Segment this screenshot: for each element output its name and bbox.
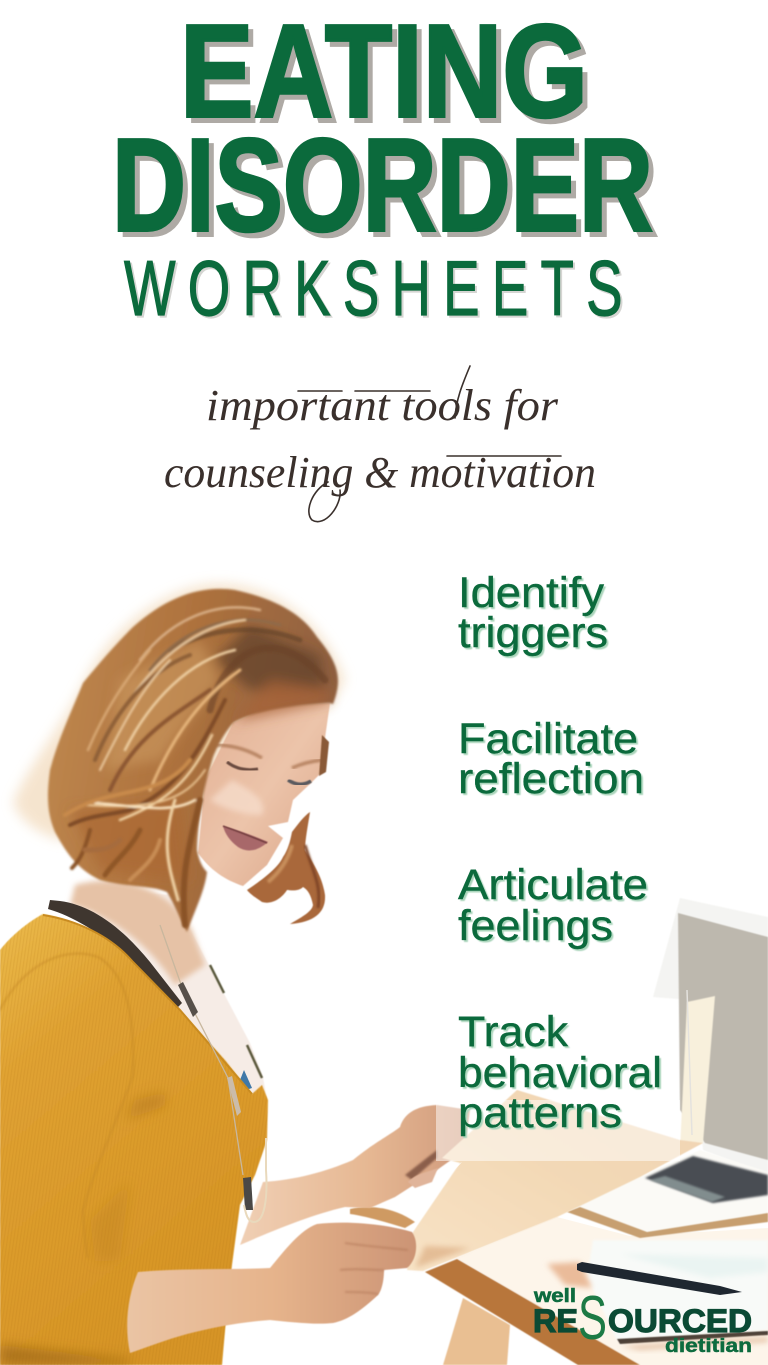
back hand finger shadow [405, 1150, 437, 1180]
table plank [425, 1259, 640, 1365]
hair strands [65, 607, 325, 925]
item: identify triggers: triggers [458, 609, 608, 657]
right hair curl [247, 812, 325, 924]
back forearm and hand [240, 1105, 470, 1245]
photo: woman reading folder at laptop [0, 584, 768, 1365]
sleeve seam [0, 954, 133, 1258]
back hand fingertips [408, 1168, 438, 1188]
item: track behavioral patterns: patterns [460, 1091, 624, 1139]
translucent text panel [436, 1100, 680, 1161]
pen [577, 1262, 742, 1295]
item: track behavioral patterns: Track [460, 1010, 571, 1058]
hair halo [13, 584, 345, 840]
front hand fingers [340, 1243, 408, 1294]
camisole edge [210, 965, 262, 1078]
front forearm and hand [127, 1223, 416, 1353]
logo: well resourced dietitian [533, 1284, 752, 1357]
item: track behavioral patterns: behavioral [460, 1051, 664, 1099]
item: track behavioral patterns: Track [458, 1008, 569, 1056]
notebook [587, 1240, 768, 1350]
hair [48, 589, 338, 932]
laptop left edge sheet line [687, 990, 692, 1135]
subtitle script [164, 366, 596, 522]
title: EATING: EATING [180, 0, 588, 144]
desk surface [457, 1217, 768, 1365]
item: identify triggers: triggers [460, 611, 610, 659]
item: track behavioral patterns: behavioral [458, 1049, 662, 1097]
folder [407, 1090, 703, 1271]
item: articulate feelings [458, 861, 650, 952]
item: facilitate reflection: Facilitate [460, 717, 640, 765]
item: articulate feelings: Articulate [458, 861, 648, 909]
item: identify triggers [458, 569, 610, 659]
title: WORKSHEETS: WORKSHEETS [124, 245, 635, 332]
necklace [160, 925, 266, 1222]
sweater shading [0, 1092, 165, 1365]
logo: well resourced dietitian: OURCED [608, 1303, 752, 1339]
right hair strip [319, 735, 329, 776]
sweater ribs [0, 914, 268, 1365]
face [198, 703, 330, 886]
subtitle script: counseling & motivation [164, 448, 596, 497]
item: facilitate reflection: reflection [460, 757, 646, 805]
neck shading [70, 881, 205, 985]
white page corner [413, 1162, 462, 1232]
neckline trim [43, 915, 252, 1094]
item: facilitate reflection: Facilitate [458, 715, 638, 763]
laptop [567, 898, 768, 1238]
item: articulate feelings: Articulate [460, 863, 650, 911]
logo: well resourced dietitian: dietitian [665, 1336, 752, 1357]
table leg [443, 1298, 510, 1365]
list: benefits [458, 569, 664, 1139]
item: facilitate reflection: reflection [458, 755, 644, 803]
neck and chest [78, 890, 267, 1100]
table back edge [350, 1207, 415, 1228]
title: WORKSHEETS: WORKSHEETS [126, 247, 637, 334]
folder shadow lower edge [415, 1246, 470, 1268]
folder back sheet [680, 996, 715, 1150]
logo: well resourced dietitian: well [533, 1286, 576, 1307]
dark strap [48, 900, 182, 1010]
item: track behavioral patterns [458, 1008, 664, 1139]
item: identify triggers: Identify [458, 569, 605, 617]
title: EATING: EATING [185, 2, 593, 150]
hair tonal blotches [70, 625, 330, 880]
item: articulate feelings: feelings [458, 902, 613, 950]
pen shadow [547, 1262, 592, 1288]
item: facilitate reflection [458, 715, 646, 805]
item: identify triggers: Identify [460, 571, 607, 619]
camisole blue [240, 1070, 252, 1090]
subtitle script: important tools for [206, 381, 559, 430]
yellow sweater [0, 914, 268, 1365]
item: track behavioral patterns: patterns [458, 1089, 622, 1137]
logo: well resourced dietitian: S [578, 1284, 607, 1353]
item: articulate feelings: feelings [460, 904, 615, 952]
logo: well resourced dietitian: RE [533, 1303, 578, 1339]
